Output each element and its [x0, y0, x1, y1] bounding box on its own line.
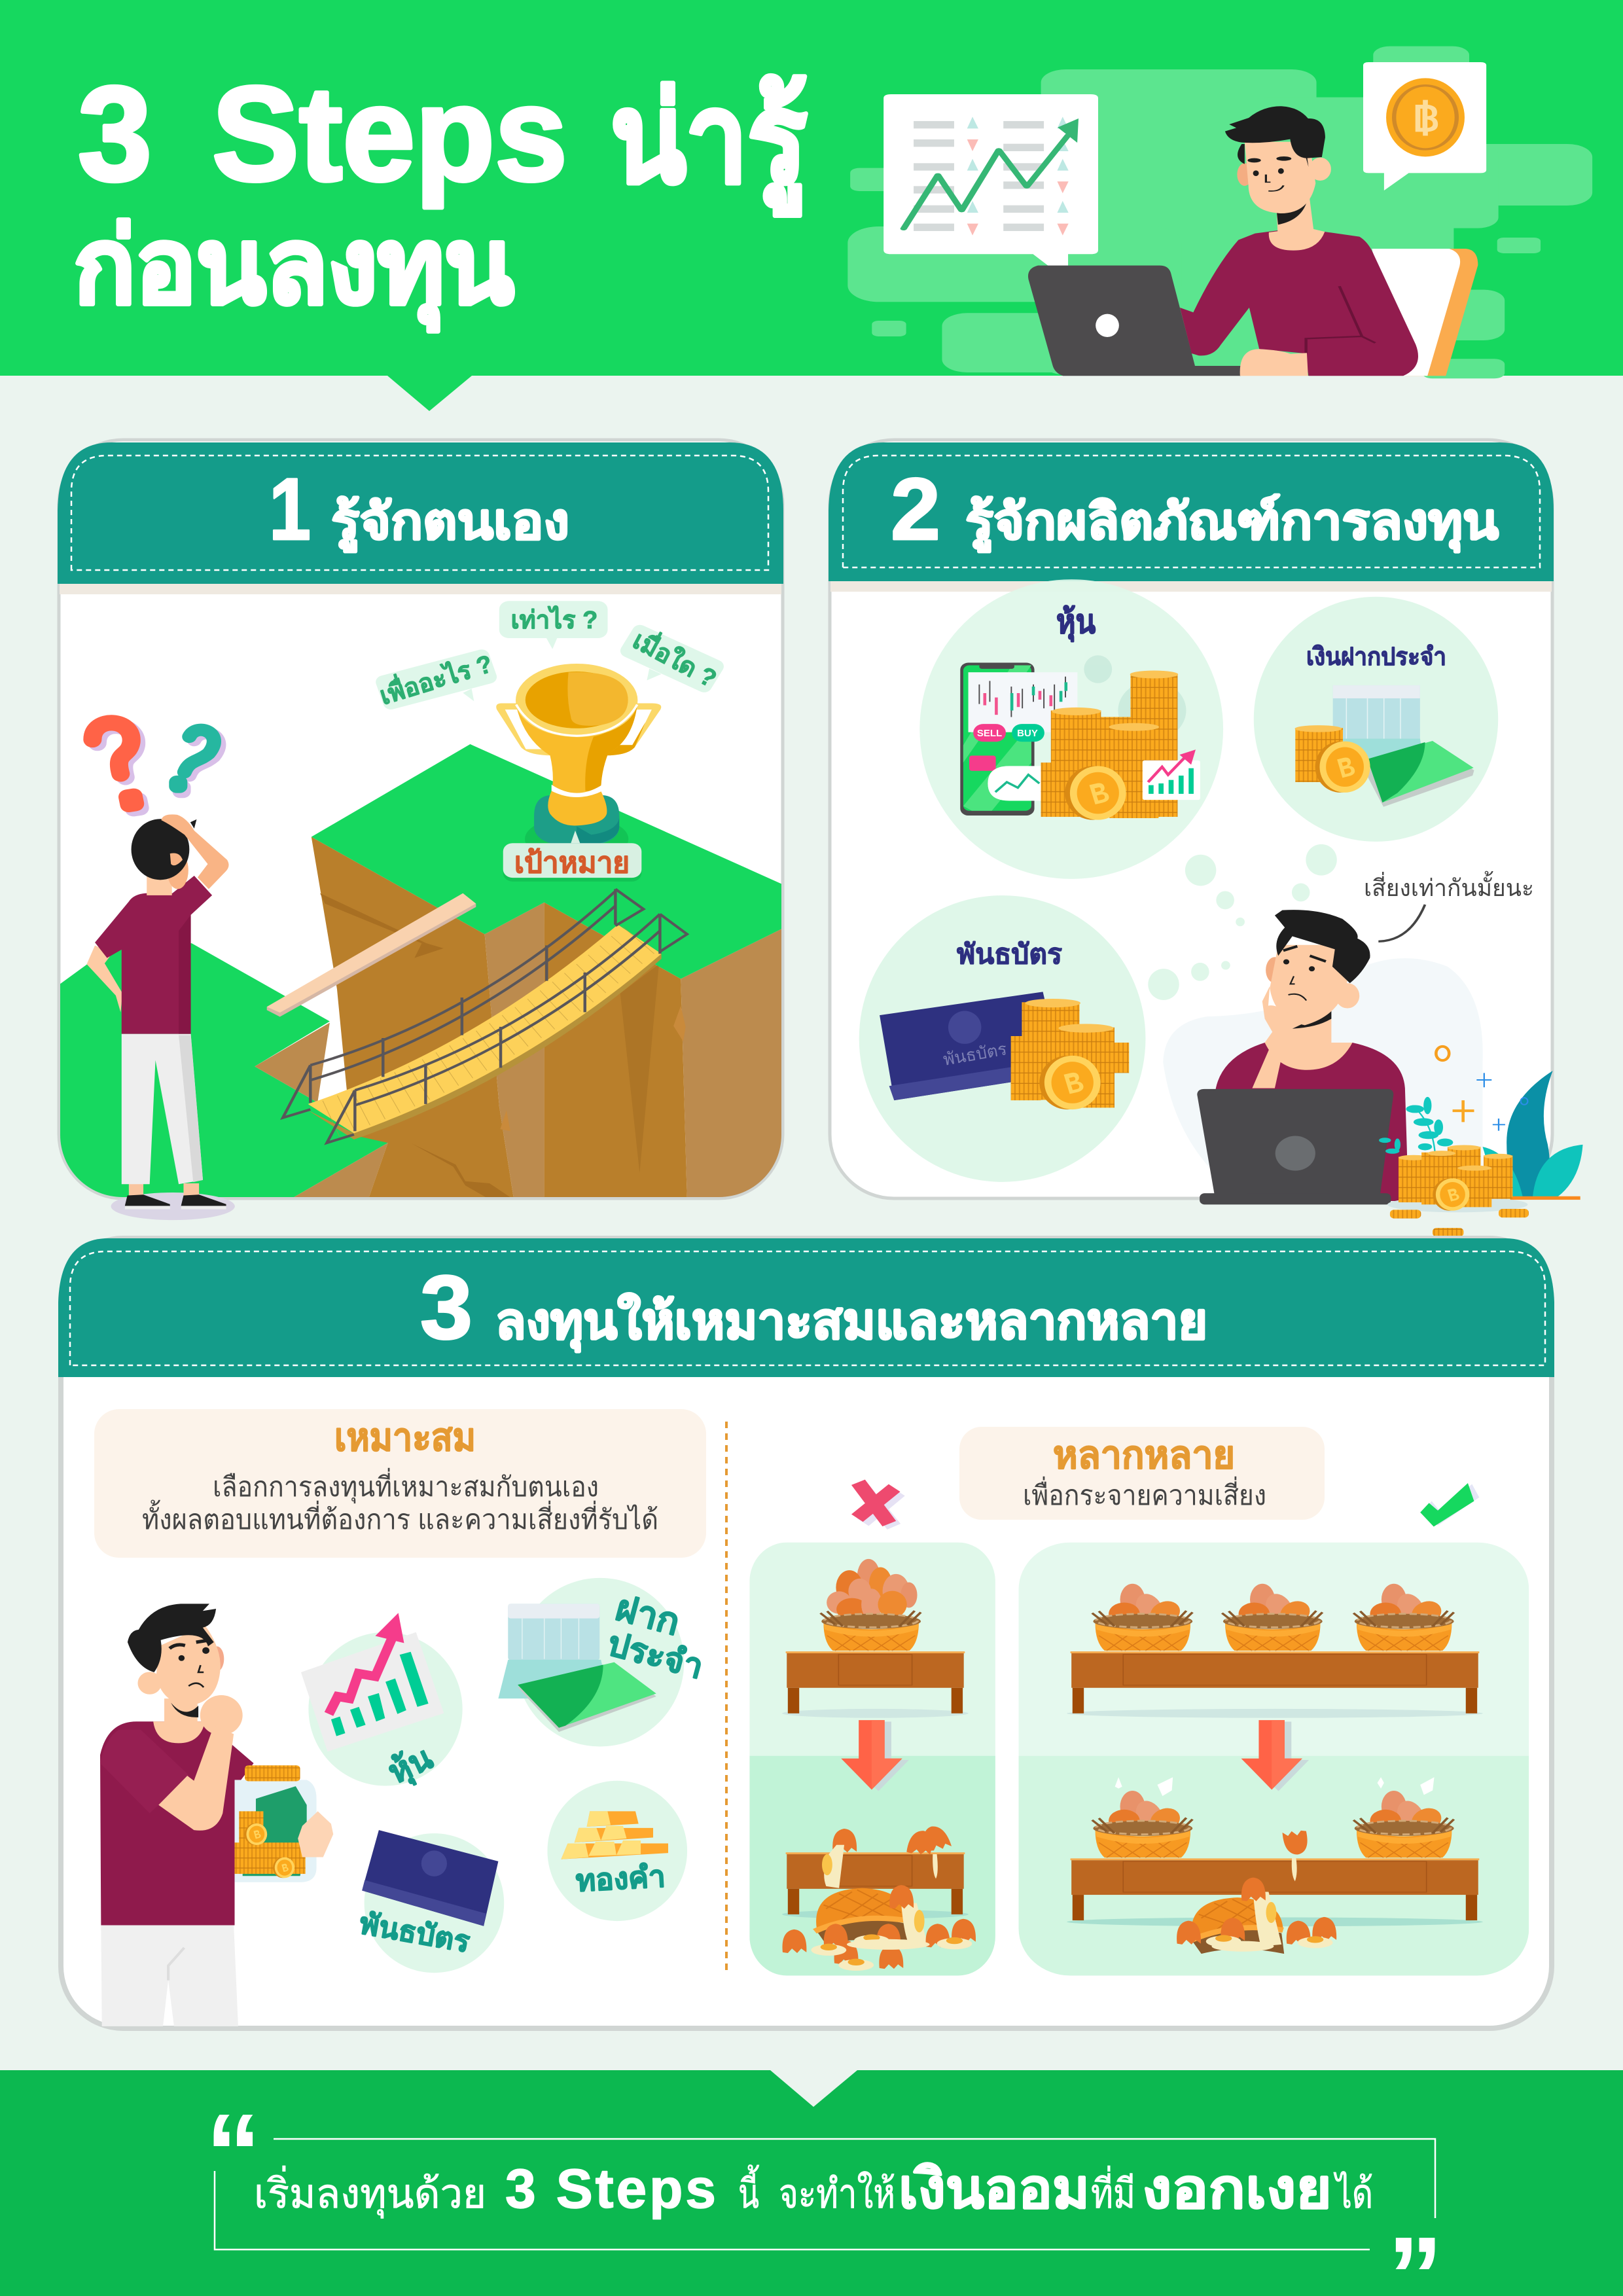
label: bond: พันธบัตร — [357, 1907, 473, 1959]
three baskets panel — [1019, 1543, 1529, 1975]
label: deposit: ฝาก — [611, 1587, 685, 1643]
suspension bridge — [283, 889, 687, 1143]
goal text: เป้าหมาย — [514, 847, 630, 879]
chart speech bubble — [883, 94, 1098, 281]
divider — [725, 1422, 728, 1970]
diversified box — [959, 1427, 1325, 1520]
lower land — [59, 939, 388, 1199]
heading number: 1 — [269, 461, 311, 558]
heading number: 2 — [891, 461, 940, 558]
title: Steps — [212, 59, 567, 209]
heading number: 3 — [420, 1257, 473, 1358]
bond card text: พันธบัตร — [942, 1039, 1008, 1069]
footer message: เริ่มลงทุนด้วย — [254, 2166, 486, 2218]
opening quote: “ — [205, 2091, 261, 2215]
thinking text: เสี่ยงเท่ากันมั้ยนะ — [1364, 870, 1534, 901]
person scratching head — [87, 814, 235, 1220]
title: ก่อนลงทุน — [74, 207, 514, 332]
footer message: ที่มี — [1091, 2166, 1135, 2217]
single basket panel — [749, 1543, 995, 1975]
person with savings jar — [100, 1604, 333, 2026]
title: 3 — [78, 59, 152, 209]
investment circles — [308, 1578, 687, 1973]
heading text: ลงทุนให้เหมาะสมและหลากหลาย — [495, 1293, 1207, 1353]
footer banner — [0, 2070, 1623, 2296]
deposit book — [498, 1604, 656, 1732]
label: deposit: ประจำ — [603, 1624, 707, 1687]
plants and coins — [1379, 1047, 1583, 1236]
cliff faces — [312, 837, 514, 1199]
pointer below header — [387, 376, 472, 411]
footer message: 3 Steps — [505, 2158, 716, 2219]
pointer into footer — [770, 2070, 857, 2107]
panel 1: know yourself — [58, 440, 783, 1220]
goal label — [503, 831, 641, 882]
header banner — [0, 0, 1623, 411]
heading text: รู้จักตนเอง — [331, 494, 569, 552]
speech line — [1378, 905, 1425, 941]
panel 1 header — [58, 442, 783, 594]
label: bonds: พันธบัตร — [957, 939, 1062, 969]
stock app buttons: BUY — [1017, 728, 1038, 739]
label: stock: หุ้น — [383, 1739, 438, 1793]
label: fixed deposit: เงินฝากประจำ — [1306, 643, 1446, 671]
coin speech bubble — [1363, 62, 1486, 190]
quote frame — [215, 2139, 1435, 2250]
suitable heading: เหมาะสม — [334, 1416, 476, 1459]
bond card — [362, 1830, 498, 1926]
suitable description — [142, 1468, 658, 1535]
stock chart card — [301, 1613, 444, 1751]
upper land — [312, 744, 782, 978]
icon: check — [1420, 1483, 1479, 1527]
bubble texts: เมื่อใด ? — [628, 622, 723, 693]
footer message: งอกเงย — [1142, 2158, 1332, 2219]
footer message: ได้ — [1333, 2171, 1373, 2217]
circle: stocks — [919, 579, 1223, 879]
panel 3: suitable and diversified — [58, 1238, 1554, 2028]
panel 2 header — [829, 442, 1554, 592]
title: น่ารู้ — [611, 69, 807, 216]
label: deposit — [603, 1587, 707, 1687]
panel 2: know investment products — [829, 440, 1583, 1236]
chair — [1372, 249, 1478, 376]
footer message — [254, 2158, 1373, 2219]
circle: bonds — [859, 895, 1145, 1182]
bubble texts: เพื่ออะไร ? — [375, 646, 495, 711]
circle: fixed deposit — [1254, 597, 1498, 842]
heading text: รู้จักผลิตภัณฑ์การลงทุน — [965, 494, 1499, 553]
label: gold: ทองคำ — [575, 1859, 666, 1898]
title — [74, 59, 807, 332]
stock app buttons: SELL — [977, 728, 1002, 739]
thought bubbles — [1148, 844, 1337, 1000]
suitable illustration — [100, 1578, 687, 2026]
footer message: จะทำให้ — [779, 2171, 895, 2217]
egg comparison — [749, 1482, 1529, 1975]
bubble texts — [375, 605, 723, 711]
label: stocks: หุ้น — [1056, 603, 1096, 642]
diversified heading: หลากหลาย — [1053, 1434, 1235, 1477]
speech bubbles — [374, 601, 726, 711]
trophy — [496, 664, 661, 862]
icon: cross — [857, 1482, 899, 1527]
island and bridge illustration — [59, 601, 782, 1199]
thinking person at laptop — [1163, 910, 1483, 1204]
footer message: เงินออม — [899, 2158, 1090, 2219]
footer message: นี้ — [738, 2164, 760, 2217]
illustration: investor at laptop — [847, 46, 1592, 378]
person — [1180, 106, 1418, 376]
wooden plank — [267, 893, 476, 1016]
laptop — [1028, 266, 1241, 376]
suitable description: เลือกการลงทุนที่เหมาะสมกับตนเอง — [213, 1468, 599, 1504]
gold bars — [561, 1811, 668, 1859]
stock app buttons — [977, 728, 1038, 739]
diversified description: เพื่อกระจายความเสี่ยง — [1023, 1477, 1266, 1511]
suitable box — [94, 1409, 706, 1558]
bubble texts: เท่าไร ? — [511, 605, 597, 634]
panel 3 header — [58, 1238, 1554, 1377]
icon: question marks — [92, 723, 219, 817]
suitable description: ทั้งผลตอบแทนที่ต้องการ และความเสี่ยงที่รับได้ — [142, 1499, 658, 1535]
